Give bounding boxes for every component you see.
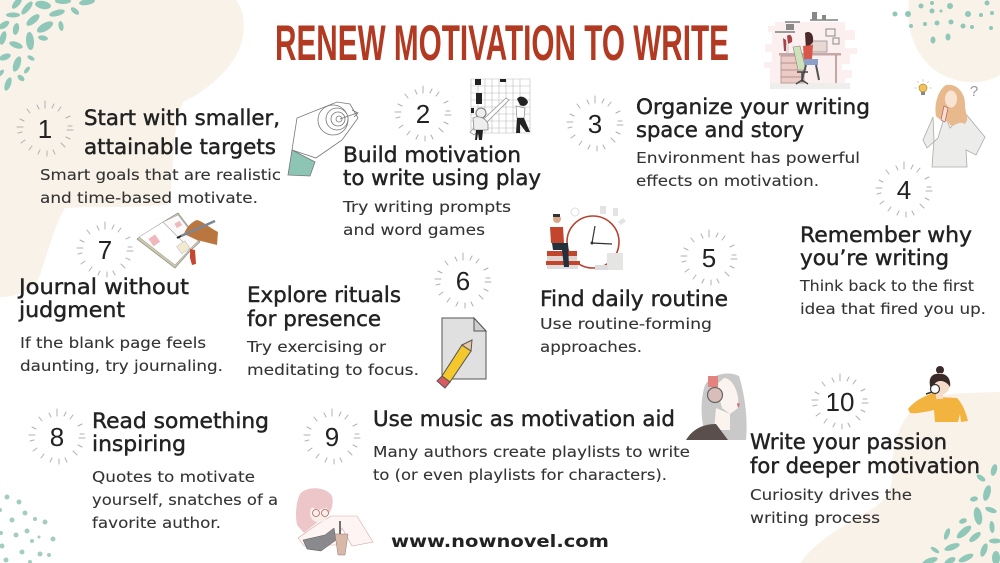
heading 8: Read something (92, 409, 269, 433)
body 6: Try exercising or (246, 338, 387, 356)
body 8: yourself, snatches of a (92, 491, 278, 509)
panel: step 10 (750, 366, 980, 527)
body 10: Curiosity drives the (750, 486, 912, 504)
body 1: and time-based motivate. (40, 189, 258, 207)
heading 8: inspiring (92, 432, 186, 456)
icon: girl with headphones (686, 373, 747, 440)
body 2: Try writing prompts (342, 198, 511, 216)
icon: girl with magnifier (908, 366, 968, 422)
panel: step 2 (342, 79, 541, 239)
dots: bottom left (0, 494, 56, 563)
number badge 8 (29, 409, 85, 464)
number badge 10: 10 (826, 387, 854, 417)
body 2: and word games (343, 221, 485, 239)
body 9: Many authors create playlists to write (373, 443, 690, 461)
heading 1: Start with smaller, (84, 106, 280, 130)
panel: step 1 (17, 101, 358, 207)
number badge 7 (77, 222, 133, 277)
number badge 3: 3 (588, 109, 602, 139)
body 4: idea that fired you up. (800, 300, 986, 318)
panel: step 3 (567, 12, 870, 190)
body 4: Think back to the first (799, 277, 974, 295)
heading 7: Journal without (17, 275, 189, 299)
body 6: meditating to focus. (247, 361, 419, 379)
panel: step 4 (799, 79, 986, 318)
panel: step 5 (540, 206, 737, 356)
heading 3: space and story (636, 118, 804, 142)
dots: top right (892, 0, 994, 44)
number badge 4: 4 (897, 175, 911, 205)
heading 3: Organize your writing (636, 95, 870, 119)
body 3: effects on motivation. (636, 172, 819, 190)
number badge 9: 9 (325, 422, 339, 452)
body 9: to (or even playlists for characters). (373, 466, 667, 484)
number badge 5: 5 (702, 243, 716, 273)
panel: step 8 (29, 409, 373, 555)
icon: hand holding target (288, 102, 358, 176)
body 5: Use routine-forming (540, 315, 712, 333)
heading 1: attainable targets (84, 135, 276, 159)
icon: thinking woman (914, 79, 985, 167)
icon: page and pencil (437, 318, 486, 388)
body 1: Smart goals that are realistic (40, 166, 281, 184)
icon: crossword and people (470, 79, 530, 140)
heading 9: Use music as motivation aid (373, 407, 675, 431)
number badge 8: 8 (50, 422, 64, 452)
heading 5: Find daily routine (540, 287, 728, 311)
icon: thinking woman: ? (970, 83, 978, 100)
heading 4: you’re writing (800, 246, 949, 270)
icon: girl reading (296, 488, 373, 555)
number badge 4 (876, 162, 932, 217)
heading 4: Remember why (800, 223, 972, 247)
icon: woman at desk (764, 12, 857, 89)
body 8: Quotes to motivate (92, 468, 255, 486)
number badge 6: 6 (456, 266, 470, 296)
number badge 2 (395, 86, 451, 141)
number badge 2: 2 (416, 99, 430, 129)
body 7: If the blank page feels (20, 334, 206, 352)
panel: step 9 (304, 373, 747, 484)
number badge 1 (17, 101, 73, 156)
number badge 5 (681, 230, 737, 285)
heading 2: to write using play (343, 166, 541, 190)
number badge 9 (304, 409, 360, 464)
panel: step 7 (17, 213, 223, 375)
panel: step 6 (246, 253, 491, 388)
icon: clock and man on books (546, 206, 626, 270)
heading 6: Explore rituals (247, 283, 401, 307)
website url: www.nownovel.com (391, 532, 609, 552)
heading 6: for presence (247, 307, 381, 331)
leaves: bottom right (921, 463, 1000, 563)
body 8: favorite author. (92, 514, 221, 532)
number badge 10 (812, 374, 868, 429)
heading 10: for deeper motivation (750, 454, 980, 478)
body 7: daunting, try journaling. (20, 357, 223, 375)
heading 10: Write your passion (750, 430, 947, 454)
body 10: writing process (750, 509, 880, 527)
number badge 6 (435, 253, 491, 308)
icon: journal and hand (137, 213, 218, 268)
body 5: approaches. (540, 338, 642, 356)
heading 2: Build motivation (343, 143, 521, 167)
number badge 1: 1 (38, 114, 52, 144)
leaves: top left (0, 0, 95, 92)
number badge 7: 7 (98, 235, 112, 265)
body 3: Environment has powerful (636, 149, 860, 167)
number badge 3 (567, 96, 623, 151)
heading 7: judgment (18, 298, 125, 322)
